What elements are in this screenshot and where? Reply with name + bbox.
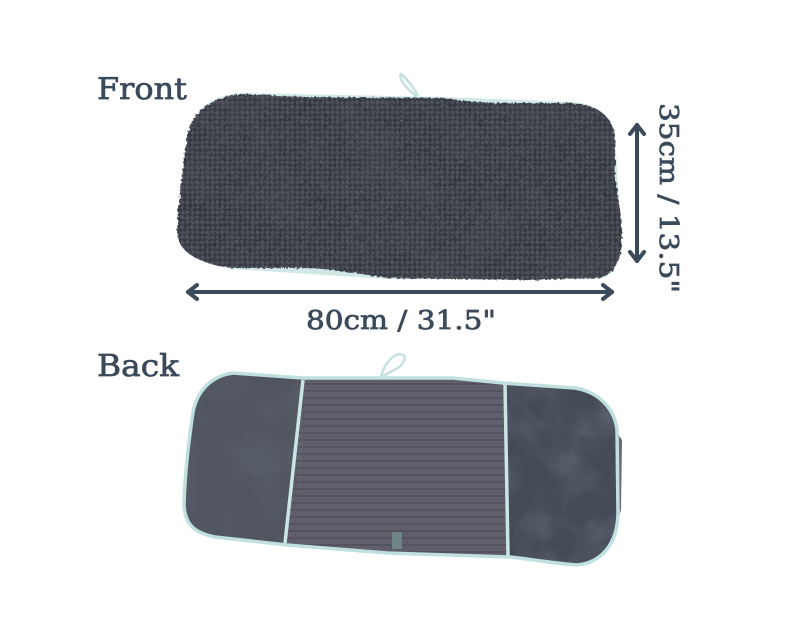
infographic canvas	[98, 72, 680, 567]
sewn-in label tag	[392, 532, 402, 549]
hanging loop: back	[381, 354, 405, 376]
hanging loop: front	[400, 74, 418, 96]
chenille shading	[170, 90, 630, 285]
left pocket	[186, 374, 302, 544]
centre ribbed panel	[284, 370, 508, 560]
towel fabric panels	[180, 370, 625, 570]
chenille surface	[177, 94, 622, 280]
left divider	[285, 380, 303, 543]
back towel photo	[180, 354, 625, 570]
height label: 35cm / 13.5"	[653, 103, 683, 293]
heading: Back: Back	[97, 349, 180, 384]
right pocket	[506, 385, 616, 564]
mint binding edge	[184, 373, 618, 565]
chenille peeking behind	[615, 430, 622, 530]
heading: Front: Front	[97, 72, 187, 107]
mint edge binding: front	[190, 93, 621, 279]
front towel photo	[170, 74, 630, 285]
width arrow	[188, 285, 612, 299]
width label: 80cm / 31.5"	[306, 306, 496, 336]
right pocket shading	[507, 385, 616, 563]
left pocket shading	[243, 452, 276, 473]
right divider	[505, 384, 508, 556]
height arrow	[630, 125, 644, 261]
